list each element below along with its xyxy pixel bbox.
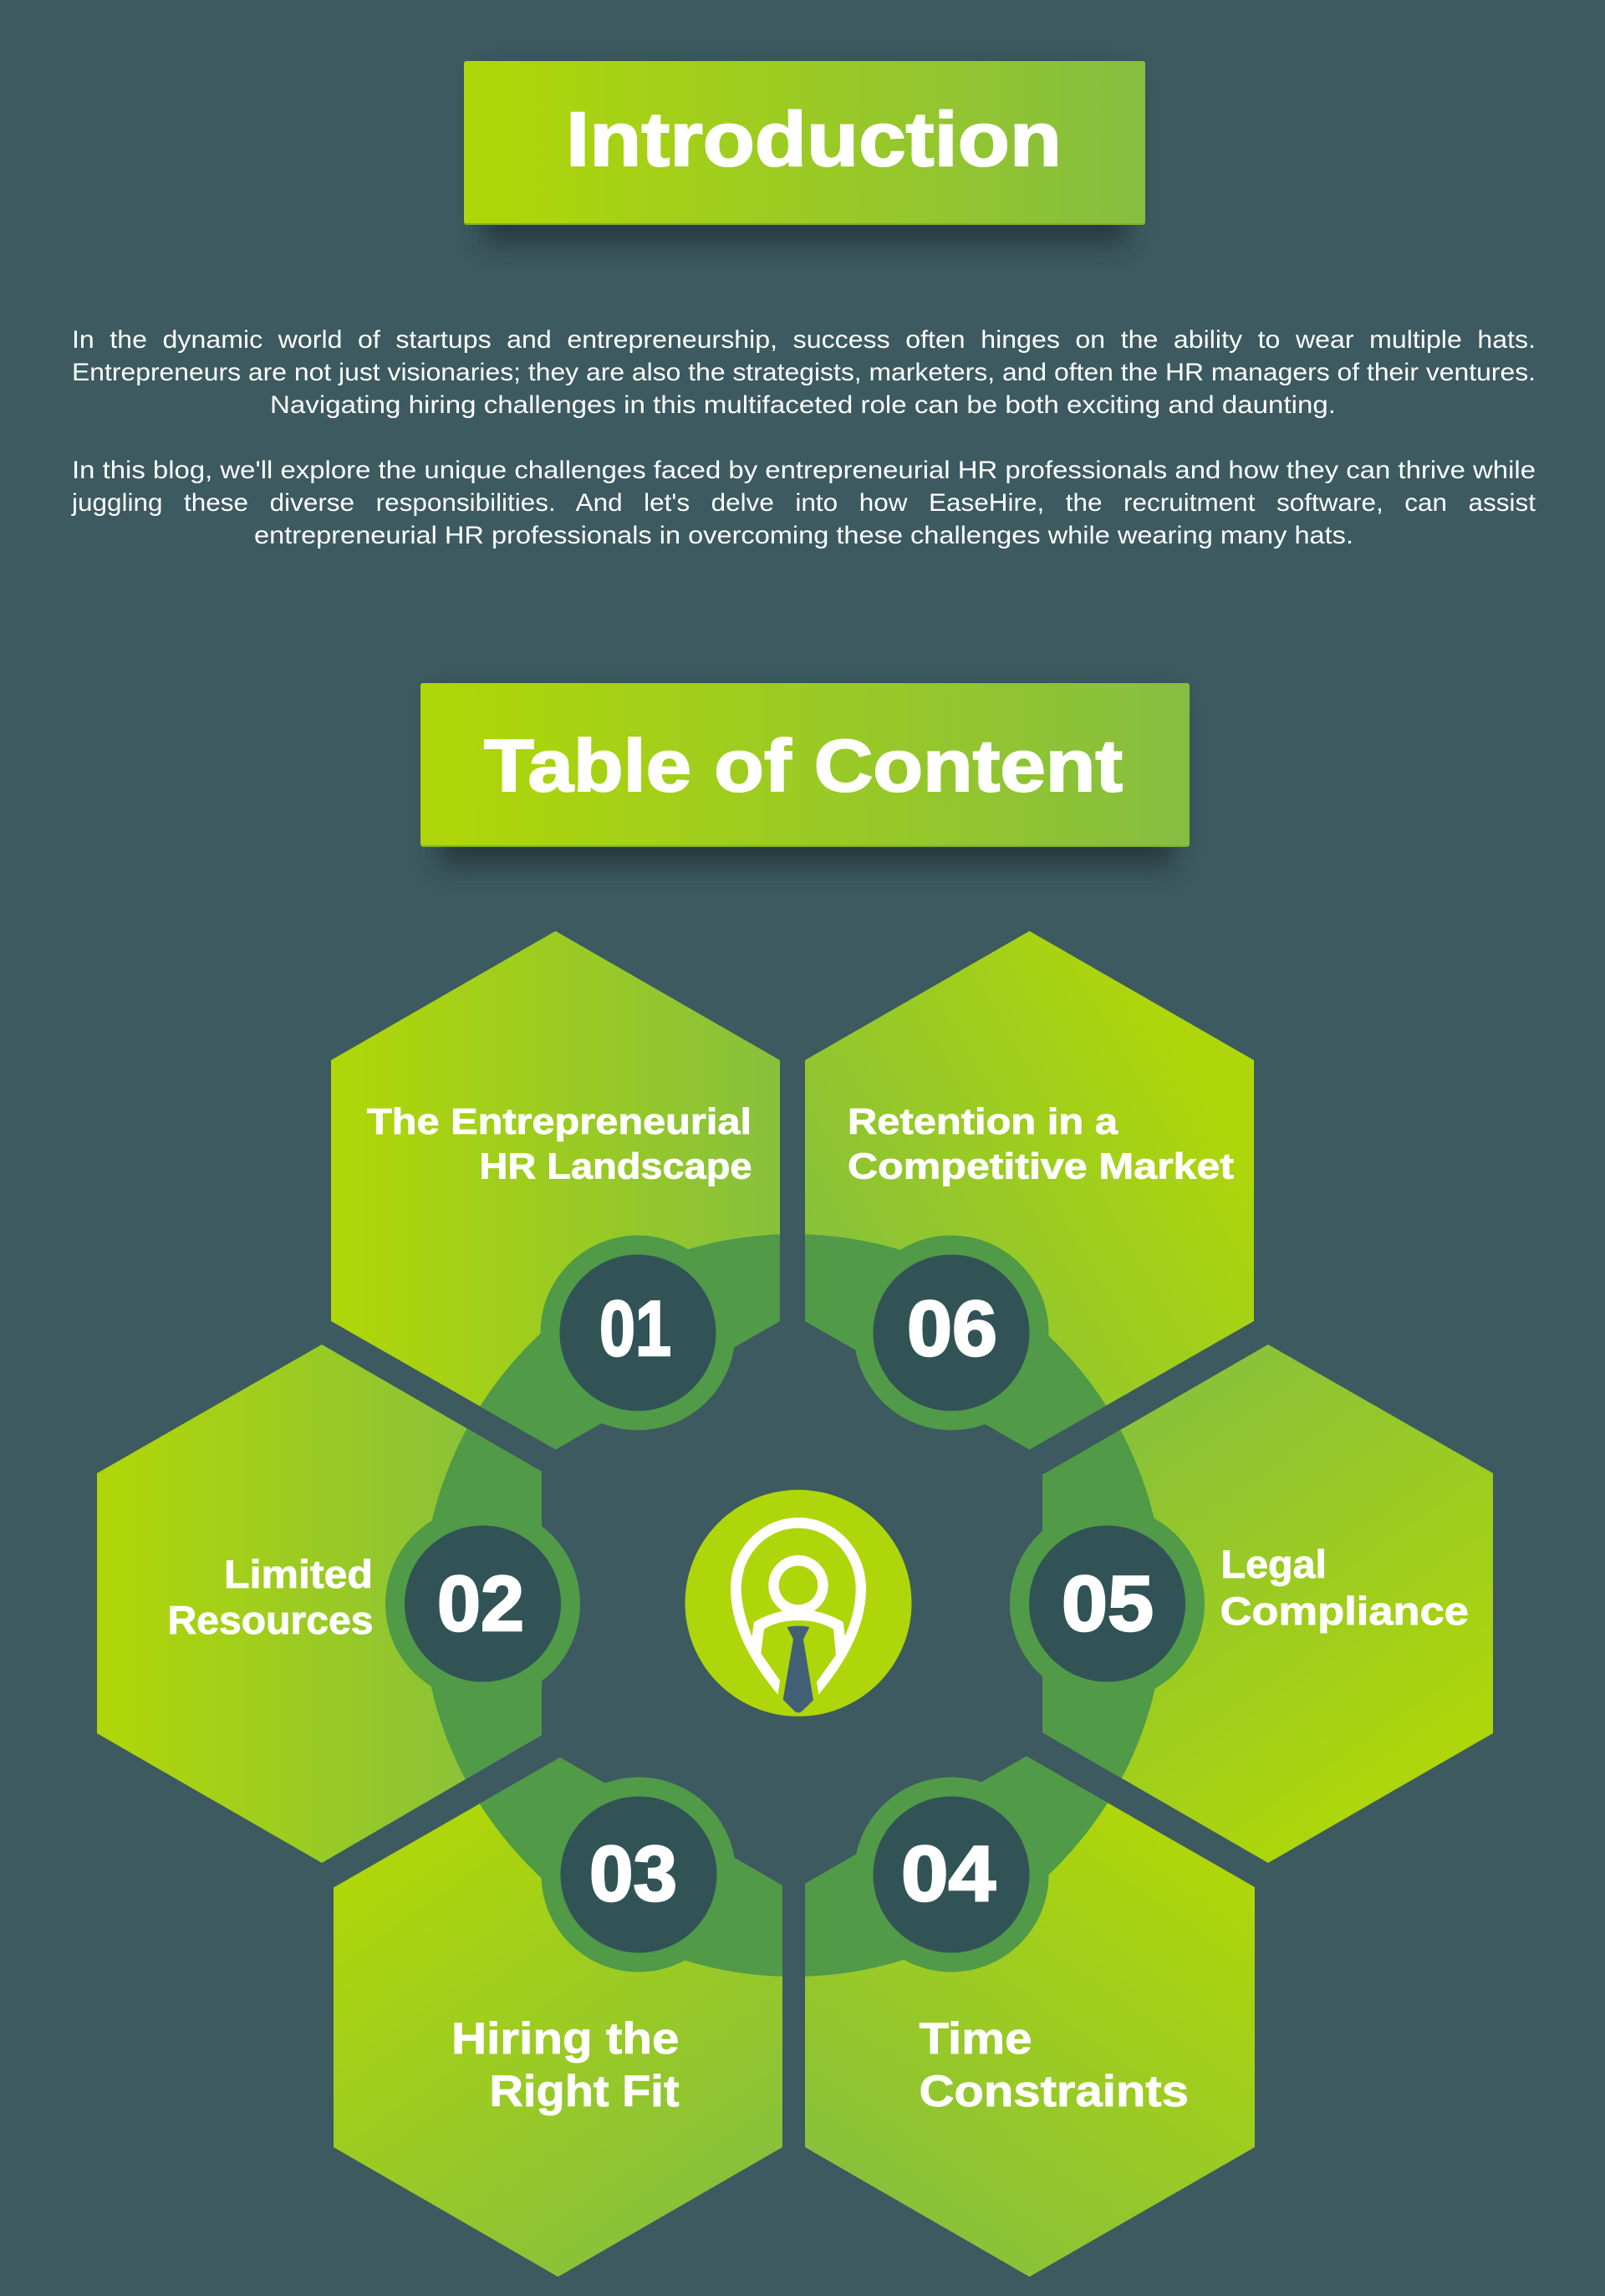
badge 06: 06 bbox=[907, 1284, 997, 1372]
badge 06 bbox=[854, 1236, 1048, 1430]
badge 04: 04 bbox=[901, 1829, 996, 1917]
label 03: Hiring the Right Fit: Hiring the bbox=[451, 2014, 679, 2064]
badge 04 bbox=[854, 1778, 1048, 1972]
label 04: Time Constraints: Constraints bbox=[920, 2067, 1189, 2116]
heading: Table of Content bbox=[420, 683, 1190, 866]
text block: introduction paragraphs: In this blog, we'll explore the unique challenges faced by entrepreneurial HR professionals and how they can thrive while bbox=[72, 457, 1536, 484]
label 05: Legal Compliance: Legal bbox=[1220, 1542, 1327, 1586]
panel 03 hexagon bbox=[334, 1758, 782, 2277]
central green ring clipped to hexagons bbox=[422, 1234, 1164, 1977]
badge 03 bbox=[542, 1778, 736, 1972]
label 03: Hiring the Right Fit: Right Fit bbox=[490, 2067, 679, 2116]
badge 03: 03 bbox=[589, 1829, 677, 1917]
label 05: Legal Compliance bbox=[1220, 1542, 1469, 1633]
panel 05 hexagon bbox=[1042, 1344, 1493, 1863]
panel 02 hexagon bbox=[97, 1344, 542, 1863]
badge 01: 01 bbox=[599, 1284, 671, 1372]
badge 01 bbox=[540, 1236, 736, 1430]
text block: introduction paragraphs: Entrepreneurs are not just visionaries; they are also the strategists, marketers, and often the HR managers of their ventures. bbox=[72, 359, 1536, 386]
label 04: Time Constraints: Time bbox=[920, 2014, 1032, 2064]
badge 02 bbox=[385, 1507, 580, 1701]
text block: introduction paragraphs bbox=[71, 326, 1536, 549]
badge 05 bbox=[1010, 1507, 1205, 1701]
label 03: Hiring the Right Fit bbox=[451, 2014, 679, 2116]
text block: introduction paragraphs: Navigating hiring challenges in this multifaceted role can be both exciting and daunting. bbox=[270, 391, 1336, 419]
panel 04 hexagon bbox=[805, 1756, 1255, 2277]
heading: Introduction: Introduction bbox=[566, 97, 1062, 182]
hexagon panels bbox=[97, 931, 1493, 2277]
heading: Introduction bbox=[464, 61, 1145, 244]
label 01: The Entrepreneurial HR Landscape: The Entrepreneurial bbox=[367, 1101, 752, 1142]
icon: person with tie inside a location pin bbox=[685, 1490, 911, 1717]
label 06: Retention in a Competitive Market: Retention in a bbox=[848, 1101, 1118, 1142]
badge 05: 05 bbox=[1062, 1559, 1154, 1647]
label 04: Time Constraints bbox=[920, 2014, 1189, 2116]
label 01: The Entrepreneurial HR Landscape bbox=[367, 1101, 752, 1187]
label 02: Limited Resources: Resources bbox=[167, 1598, 373, 1642]
badge 02: 02 bbox=[437, 1559, 524, 1647]
label 01: The Entrepreneurial HR Landscape: HR Landscape bbox=[480, 1145, 752, 1187]
panel 06 hexagon bbox=[805, 931, 1254, 1450]
panel 01 hexagon bbox=[331, 931, 780, 1450]
label 02: Limited Resources: Limited bbox=[224, 1552, 373, 1596]
text block: introduction paragraphs: entrepreneurial HR professionals in overcoming these challenges while wearing many hats. bbox=[254, 522, 1353, 549]
text block: introduction paragraphs: In the dynamic world of startups and entrepreneurship, success often hinges on the ability to wear multiple hats. bbox=[72, 326, 1536, 354]
label 05: Legal Compliance: Compliance bbox=[1220, 1589, 1469, 1633]
label 02: Limited Resources bbox=[167, 1552, 373, 1642]
label 06: Retention in a Competitive Market bbox=[848, 1101, 1234, 1187]
label 06: Retention in a Competitive Market: Competitive Market bbox=[848, 1145, 1234, 1187]
heading: Table of Content: Table of Content bbox=[484, 724, 1123, 807]
text block: introduction paragraphs: juggling these diverse responsibilities. And let's delve into how EaseHire, the recruitment software, can assist bbox=[71, 489, 1536, 517]
